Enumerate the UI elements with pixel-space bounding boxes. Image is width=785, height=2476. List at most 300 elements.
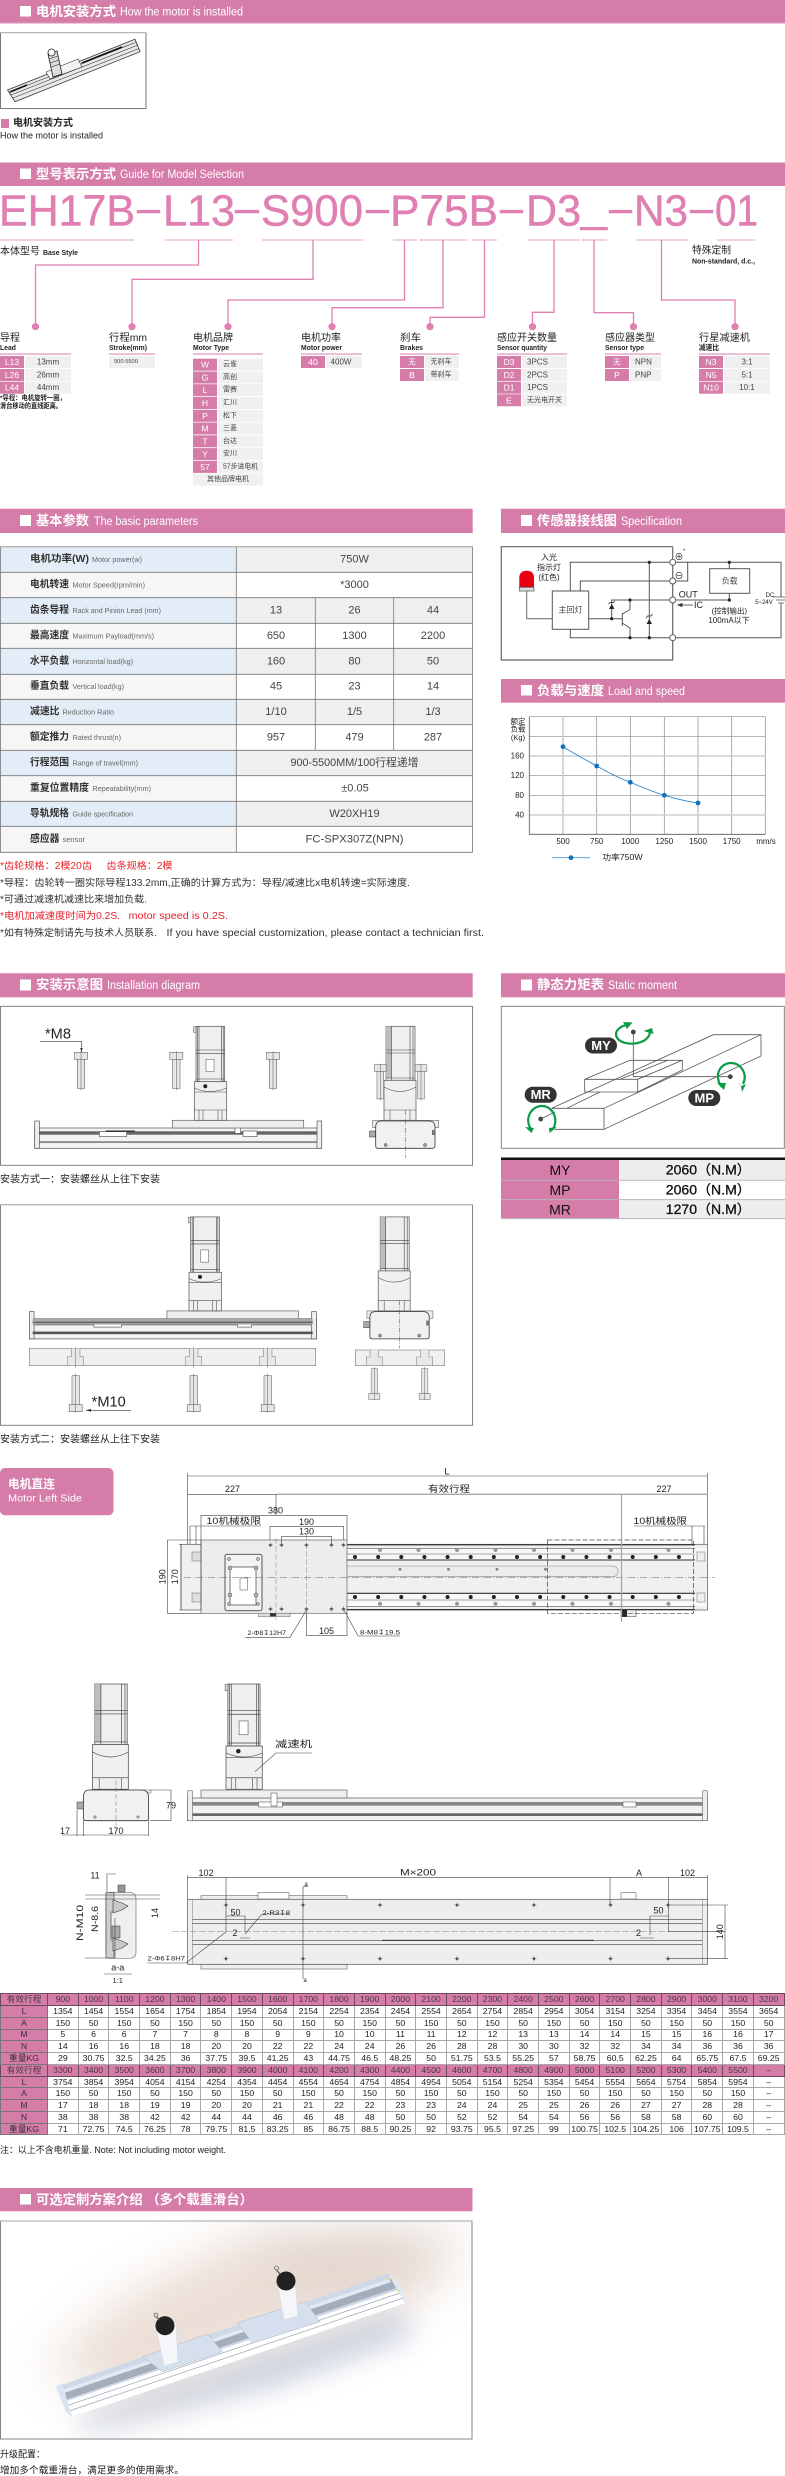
table: stroke dimensions and weight: 5754 (667, 2077, 686, 2087)
table: stroke dimensions and weight: 19 (150, 2100, 160, 2110)
selector: sensor quantity (497, 331, 567, 406)
table: stroke dimensions and weight: 21 (273, 2100, 282, 2110)
table: stroke dimensions and weight: 1500 (237, 1994, 257, 2004)
selector: lead: 26mm (37, 370, 59, 380)
selector: planetary reducer: 3:1 (741, 358, 753, 366)
icon: MR rotation arrow (525, 1106, 557, 1133)
table: stroke dimensions and weight: 3000 (698, 1994, 717, 2004)
table: stroke dimensions and weight: 4954 (421, 2077, 441, 2087)
table: basic parameters: 26 (348, 604, 361, 616)
table: stroke dimensions and weight: 28 (702, 2100, 712, 2110)
drawing: bottom view with dimensions: 102 (680, 1868, 695, 1878)
notes: parameter footnotes (0, 859, 484, 939)
table: stroke dimensions and weight: 150 (301, 2088, 316, 2098)
table: static moment (501, 1158, 785, 1219)
label: MR: MR (531, 1087, 551, 1102)
caption: installation method one: 安装方式一：安装螺丝从上往下安装 (0, 1172, 160, 1186)
table: stroke dimensions and weight: 6 (91, 2029, 96, 2039)
table: stroke dimensions and weight: 24 (365, 2041, 375, 2051)
table: stroke dimensions and weight: 50 (89, 2088, 98, 2098)
table: stroke dimensions and weight: 4500 (421, 2065, 441, 2075)
table: stroke dimensions and weight: 5954 (728, 2077, 748, 2087)
table: stroke dimensions and weight: 29 (58, 2053, 68, 2063)
table: stroke dimensions and weight: 1654 (145, 2006, 165, 2016)
table: stroke dimensions and weight: 71 (58, 2124, 68, 2134)
table: stroke dimensions and weight: 36 (181, 2053, 190, 2063)
diagram: sensor wiring: DC (766, 593, 775, 599)
line chart: load vs speed: 500 (556, 837, 570, 846)
table: stroke dimensions and weight: 150 (56, 2088, 70, 2098)
table: stroke dimensions and weight: 19 (181, 2100, 190, 2110)
selector: planetary reducer: N5 (706, 370, 717, 380)
table: stroke dimensions and weight: 4300 (360, 2065, 379, 2075)
table: basic parameters: Motor Speed(rpm/min) (72, 582, 145, 590)
drawing: section a-a (75, 1870, 160, 1985)
drawing: bottom view with dimensions: A (636, 1868, 642, 1878)
table: stroke dimensions and weight: 13 (549, 2029, 559, 2039)
selector: sensor quantity: 感应开关数量 (497, 331, 557, 344)
table: basic parameters: 957 (267, 732, 285, 744)
table: stroke dimensions and weight: 3354 (667, 2006, 686, 2016)
table: stroke dimensions and weight: 53.5 (484, 2053, 501, 2063)
table: stroke dimensions and weight: 34 (641, 2041, 651, 2051)
table: stroke dimensions and weight (0, 1993, 785, 2135)
panel: multi-carriage render (0, 2220, 472, 2439)
table: stroke dimensions and weight: 85 (304, 2124, 313, 2134)
table: stroke dimensions and weight: 5854 (698, 2077, 717, 2087)
selector: motor type: Motor Type (193, 343, 229, 352)
table: stroke dimensions and weight: 30 (518, 2041, 528, 2051)
table: basic parameters: 1300 (342, 630, 367, 642)
selector: lead: 滑台移动的直线距离。 (0, 401, 62, 410)
table: stroke dimensions and weight: 14 (58, 2041, 68, 2051)
table: stroke dimensions and weight: 3554 (728, 2006, 748, 2016)
table: stroke dimensions and weight: – (766, 2077, 771, 2087)
table: stroke dimensions and weight: 43 (304, 2053, 313, 2063)
drawing: top view with dimensions: 190 (299, 1517, 314, 1527)
table: stroke dimensions and weight: 150 (547, 2088, 561, 2098)
drawing: side view (364, 1217, 433, 1348)
table: stroke dimensions and weight: 69.25 (758, 2053, 780, 2063)
table: basic parameters: 重复位置精度 (30, 781, 89, 794)
table: stroke dimensions and weight: 54 (549, 2112, 559, 2122)
selector: sensor quantity: 2PCS (527, 370, 548, 380)
table: stroke dimensions and weight: – (766, 2088, 771, 2098)
caption: how the motor is installed: 电机安装方式 (13, 116, 73, 129)
selector: sensor quantity: 1PCS (527, 383, 548, 392)
diagram: sensor wiring: ⊖ (674, 571, 684, 581)
table: basic parameters: 1/3 (425, 706, 441, 718)
label: MP: MP (695, 1090, 714, 1106)
bolts: M8 (40, 1026, 280, 1090)
table: basic parameters: 750W (340, 554, 369, 566)
line chart: load vs speed (510, 716, 776, 862)
table: basic parameters: 垂直负载 (30, 679, 69, 692)
selector: motor type (193, 331, 263, 486)
table: basic parameters: Vertical load(kg) (72, 684, 124, 691)
table: stroke dimensions and weight: 15 (672, 2029, 681, 2039)
table: stroke dimensions and weight: 4054 (145, 2077, 165, 2087)
table: stroke dimensions and weight: 58 (641, 2112, 651, 2122)
table: stroke dimensions and weight: 81.5 (238, 2124, 255, 2134)
table: stroke dimensions and weight: 5654 (636, 2077, 656, 2087)
table: stroke dimensions and weight: 17 (764, 2029, 773, 2039)
table: stroke dimensions and weight: 2254 (329, 2006, 349, 2016)
selector: brakes: B (409, 370, 415, 380)
selector: brakes: 刹车 (400, 331, 421, 344)
table: stroke dimensions and weight: 5454 (575, 2077, 594, 2087)
table: basic parameters: Guide specification (72, 811, 133, 818)
drawing: bottom view with dimensions: 2-R3↧8 (262, 1909, 290, 1917)
drawing: carriage plates (142, 2302, 320, 2372)
table: basic parameters: 行程范围 (30, 756, 69, 768)
table: stroke dimensions and weight: 16 (733, 2029, 743, 2039)
table: basic parameters: Range of travel(mm) (72, 760, 138, 768)
table: stroke dimensions and weight: 50 (764, 2018, 773, 2028)
table: stroke dimensions and weight: 44 (242, 2112, 252, 2122)
diagram: sensor wiring: (控制输出) (712, 606, 747, 616)
table: stroke dimensions and weight: 102.5 (604, 2124, 626, 2134)
table: stroke dimensions and weight: 5500 (728, 2065, 748, 2075)
notes: parameter footnotes: *齿轮规格：2模20齿 (0, 859, 92, 872)
selector: sensor type: NPN (635, 358, 652, 366)
table: stroke dimensions and weight: 52 (457, 2112, 467, 2122)
table: stroke dimensions and weight: 22 (365, 2100, 375, 2110)
table: stroke dimensions and weight: 23 (426, 2100, 436, 2110)
table: stroke dimensions and weight: 7 (183, 2029, 188, 2039)
table: stroke dimensions and weight: 3100 (728, 1994, 748, 2004)
drawing: section a-a: a-a (111, 1962, 124, 1972)
drawing: bottom view with dimensions: 50 (653, 1906, 664, 1916)
table: stroke dimensions and weight: 79.75 (205, 2124, 227, 2134)
heading: installation diagram: 安装示意图 (36, 976, 103, 992)
line chart: load vs speed: 120 (511, 771, 525, 780)
drawing: top view with dimensions: 227 (225, 1484, 240, 1494)
table: stroke dimensions and weight: 3300 (53, 2065, 72, 2075)
selector: motor type: L (203, 385, 208, 395)
model code: EH17B (0, 186, 135, 236)
diagram: sensor wiring: OUT (679, 589, 698, 599)
table: stroke dimensions and weight: 42 (150, 2112, 160, 2122)
table: stroke dimensions and weight: 17 (58, 2100, 68, 2110)
table: stroke dimensions and weight: 1400 (207, 1994, 226, 2004)
drawing: top view with dimensions: 227 (656, 1484, 672, 1494)
table: basic parameters: 900-5500MM/100行程递增 (290, 755, 418, 769)
table: stroke dimensions and weight: 28 (488, 2041, 497, 2051)
table: stroke dimensions and weight: 4900 (544, 2065, 564, 2075)
table: basic parameters: 287 (424, 732, 442, 744)
table: stroke dimensions and weight: 2700 (606, 1994, 625, 2004)
table: static moment: MR (549, 1202, 571, 1218)
selector: motor type: 雷赛 (223, 385, 237, 394)
table: stroke dimensions and weight: 67.5 (730, 2053, 746, 2063)
table: stroke dimensions and weight: – (766, 2124, 771, 2134)
table: stroke dimensions and weight: 72.75 (83, 2124, 104, 2134)
table: stroke dimensions and weight: 2354 (360, 2006, 379, 2016)
table: stroke dimensions and weight: 99 (549, 2124, 559, 2134)
table: stroke dimensions and weight: 104.25 (633, 2124, 659, 2134)
selector: stroke: 行程mm (109, 331, 147, 344)
table: stroke dimensions and weight: 9 (306, 2029, 311, 2039)
table: stroke dimensions and weight: 60 (733, 2112, 743, 2122)
drawing: motor end view: 17 (60, 1826, 70, 1836)
table: stroke dimensions and weight: 23 (396, 2100, 405, 2110)
selector: brakes: 无 (408, 358, 416, 366)
line chart: load vs speed: mm/s (756, 837, 776, 846)
table: stroke dimensions and weight: 1900 (360, 1994, 379, 2004)
table: stroke dimensions and weight: 65.75 (696, 2053, 718, 2063)
bolts: M8: *M8 (45, 1026, 71, 1042)
drawing: motor side view with reducer label: 减速机 (275, 1738, 313, 1750)
table: stroke dimensions and weight: 18 (89, 2100, 98, 2110)
label: non-standard: 特殊定制 (692, 244, 731, 256)
selector: planetary reducer: 行星减速机 (699, 331, 750, 344)
table: stroke dimensions and weight: 56 (580, 2112, 589, 2122)
selector: motor type: 三菱 (223, 423, 237, 432)
table: stroke dimensions and weight: 22 (304, 2041, 313, 2051)
table: stroke dimensions and weight: 4254 (207, 2077, 226, 2087)
drawing: top view with dimensions: 10机械极限 (206, 1515, 261, 1526)
table: stroke dimensions and weight: A (21, 2088, 27, 2098)
selector: stroke (109, 331, 155, 368)
table: stroke dimensions and weight: 4200 (329, 2065, 349, 2075)
table: stroke dimensions and weight: 4800 (513, 2065, 533, 2075)
table: stroke dimensions and weight: 60.5 (607, 2053, 624, 2063)
selector: lead (0, 332, 71, 410)
table: stroke dimensions and weight: 10 (334, 2029, 344, 2039)
table: stroke dimensions and weight: 27 (641, 2100, 651, 2110)
notes: parameter footnotes: *导程：齿轮转一圈实际导程133.2mm,正确的计算方式为：导程/减速比x电机转速=实际速度. (0, 876, 410, 889)
table: stroke dimensions and weight: 41.25 (267, 2053, 289, 2063)
table: stroke dimensions and weight: 12 (488, 2029, 497, 2039)
diagram: sensor wiring: 5~24V (755, 600, 773, 606)
table: basic parameters: Horizontal load(kg) (72, 659, 133, 666)
table: stroke dimensions and weight: 3154 (606, 2006, 625, 2016)
label: non-standard: Non-standard, d.c., (692, 256, 755, 266)
bolts: M10: *M10 (92, 1394, 126, 1410)
table: stroke dimensions and weight: 51.75 (451, 2053, 473, 2063)
table: stroke dimensions and weight: 4454 (268, 2077, 287, 2087)
heading: sensor specification (501, 509, 785, 533)
line chart: load vs speed: 40 (515, 810, 525, 820)
heading: basic parameters (0, 509, 473, 533)
table: basic parameters: 最高速度 (30, 628, 69, 642)
table: stroke dimensions and weight: 1454 (84, 2006, 103, 2016)
selector: motor type: 安川 (223, 449, 237, 458)
table: stroke dimensions and weight: 109.5 (727, 2124, 749, 2134)
selector: sensor type: 无 (613, 358, 621, 366)
notes: parameter footnotes: *如有特殊定制请先与技术人员联系. (0, 926, 157, 939)
heading: installation diagram: Installation diagram (107, 980, 200, 992)
table: stroke dimensions and weight: 3454 (698, 2006, 717, 2016)
table: stroke dimensions and weight: 16 (89, 2041, 98, 2051)
table: stroke dimensions and weight: 重量KG (9, 2124, 39, 2134)
heading: basic parameters: The basic parameters (94, 516, 198, 528)
table: stroke dimensions and weight: 1354 (53, 2006, 72, 2016)
selector: brakes: 无刹车 (430, 356, 452, 366)
table: stroke dimensions and weight: 24 (488, 2100, 497, 2110)
table: stroke dimensions and weight: 3500 (115, 2065, 134, 2075)
table: basic parameters: 2200 (421, 630, 445, 642)
caption: how the motor is installed: How the motor is installed (0, 130, 103, 140)
table: basic parameters: 导轨规格 (30, 806, 69, 819)
selector: lead: 44mm (37, 383, 59, 392)
table: stroke dimensions and weight: 42 (181, 2112, 190, 2122)
label: MY: MY (591, 1038, 611, 1053)
drawing: rail (56, 2268, 405, 2417)
table: stroke dimensions and weight: 20 (211, 2100, 221, 2110)
selector: motor type: 台达 (223, 436, 237, 445)
table: stroke dimensions and weight: 4100 (299, 2065, 318, 2075)
drawing: top view with dimensions (158, 1466, 715, 1637)
model code: – (690, 184, 713, 232)
table: stroke dimensions and weight: 5 (60, 2029, 65, 2039)
model code: – (235, 184, 260, 232)
table: stroke dimensions and weight: 150 (485, 2018, 500, 2028)
diagram: sensor wiring: 100mA以下 (708, 616, 750, 625)
table: stroke dimensions and weight: 50 (334, 2018, 344, 2028)
table: stroke dimensions and weight: 3700 (176, 2065, 195, 2075)
diagram: sensor wiring: (红色) (538, 572, 560, 582)
label: MY (585, 1038, 617, 1054)
table: stroke dimensions and weight: 26 (580, 2100, 589, 2110)
drawing: bottom view with dimensions: 102 (198, 1868, 214, 1878)
notes: parameter footnotes: If you have special customization, please contact a technician first. (166, 928, 484, 939)
table: basic parameters: *3000 (340, 579, 369, 591)
table: stroke dimensions and weight: 50 (273, 2018, 282, 2028)
table: stroke dimensions and weight: 4700 (483, 2065, 502, 2075)
selector: motor type: T (202, 436, 208, 446)
table: stroke dimensions and weight: 55.25 (512, 2053, 534, 2063)
table: basic parameters: 45 (270, 681, 282, 693)
drawing: top view with dimensions: 10机械极限 (634, 1515, 687, 1526)
table: stroke dimensions and weight: 20 (211, 2041, 221, 2051)
diagram: sensor wiring: * (683, 549, 686, 555)
table: stroke dimensions and weight: 58 (672, 2112, 681, 2122)
notes: parameter footnotes: 齿条规格：2模 (106, 859, 173, 872)
table: stroke dimensions and weight: 20 (242, 2041, 252, 2051)
table: stroke dimensions and weight: 1854 (207, 2006, 226, 2016)
table: stroke dimensions and weight: 150 (362, 2088, 377, 2098)
table: stroke dimensions and weight: 3054 (575, 2006, 594, 2016)
table: basic parameters: 160 (267, 655, 285, 667)
drawing: section a-a: N-M10 (75, 1905, 85, 1941)
table: basic parameters: 50 (427, 655, 439, 667)
table: stroke dimensions and weight: 50 (211, 2088, 221, 2098)
selector: brakes: Brakes (400, 343, 423, 352)
table: basic parameters: 电机功率(W) (30, 552, 89, 565)
table: basic parameters: 44 (427, 604, 439, 616)
drawing: motors (154, 2266, 298, 2366)
table: stroke dimensions and weight: 9 (275, 2029, 280, 2039)
table: stroke dimensions and weight: 5154 (483, 2077, 502, 2087)
table: stroke dimensions and weight: 24 (334, 2041, 344, 2051)
model code: D3 (526, 186, 581, 236)
caption: upgrade configuration (0, 2448, 184, 2476)
drawing: section a-a: 1:1 (112, 1976, 123, 1985)
table: stroke dimensions and weight: 7 (152, 2029, 157, 2039)
table: static moment: 2060（N.M） (666, 1182, 751, 1198)
table: stroke dimensions and weight: 37.75 (205, 2053, 227, 2063)
table: stroke dimensions and weight: 5300 (667, 2065, 686, 2075)
table: stroke dimensions and weight: 150 (669, 2018, 684, 2028)
table: static moment: MY (550, 1162, 571, 1178)
table: stroke dimensions and weight: 50 (89, 2018, 98, 2028)
table: stroke dimensions and weight: 38 (58, 2112, 68, 2122)
table: basic parameters: FC-SPX307Z(NPN) (306, 833, 404, 845)
table: stroke dimensions and weight: 1000 (84, 1994, 103, 2004)
table: stroke dimensions and weight: 34.25 (144, 2053, 166, 2063)
table: stroke dimensions and weight: 32 (610, 2041, 620, 2051)
table: stroke dimensions and weight: 25 (518, 2100, 528, 2110)
table: stroke dimensions and weight: 14 (580, 2029, 589, 2039)
table: stroke dimensions and weight: 3254 (636, 2006, 656, 2016)
table: stroke dimensions and weight: 150 (731, 2088, 745, 2098)
label: base style (0, 244, 78, 258)
selector: lead: Lead (0, 343, 16, 352)
model code: – (609, 184, 632, 232)
selector: lead: L26 (5, 370, 19, 380)
tag: motor left side: Motor Left Side (8, 1494, 82, 1504)
table: stroke dimensions and weight: 92 (426, 2124, 436, 2134)
table: stroke dimensions and weight: 36 (702, 2041, 712, 2051)
drawing: front view (35, 1026, 322, 1148)
table: stroke dimensions and weight: N (21, 2112, 27, 2122)
table: stroke dimensions and weight: – (766, 2100, 771, 2110)
table: basic parameters: 80 (348, 655, 361, 667)
table: basic parameters: 23 (348, 681, 361, 693)
selector: motor power: 400W (331, 358, 352, 366)
table: basic parameters: W20XH19 (329, 808, 380, 820)
table: stroke dimensions and weight: 150 (240, 2018, 254, 2028)
table: stroke dimensions and weight: 16 (702, 2029, 712, 2039)
table: stroke dimensions and weight: 4854 (391, 2077, 410, 2087)
caption: installation method two: 安装方式二：安装螺丝从上往下安装 (0, 1432, 160, 1446)
table: stroke dimensions and weight: 150 (669, 2088, 684, 2098)
table: stroke dimensions and weight: 28 (733, 2100, 743, 2110)
table: stroke dimensions and weight: 86.75 (328, 2124, 350, 2134)
icon: MP rotation arrow (717, 1063, 746, 1092)
drawing: motor side view with reducer label (188, 1684, 708, 1821)
table: stroke dimensions and weight: 12 (457, 2029, 467, 2039)
heading: static moment (501, 973, 785, 997)
table: stroke dimensions and weight: 60 (702, 2112, 712, 2122)
table: stroke dimensions and weight: 44 (211, 2112, 221, 2122)
table: stroke dimensions and weight: 39.5 (238, 2053, 255, 2063)
heading: how the motor is installed (0, 0, 785, 24)
table: stroke dimensions and weight: – (766, 2112, 771, 2122)
selector: sensor quantity: D2 (504, 370, 515, 380)
table: stroke dimensions and weight: 50 (580, 2018, 589, 2028)
selector: sensor quantity: 3PCS (527, 358, 548, 366)
selector: sensor quantity: D1 (504, 383, 515, 393)
table: stroke dimensions and weight: 32.5 (116, 2053, 133, 2063)
table: stroke dimensions and weight: 93.75 (451, 2124, 473, 2134)
table: basic parameters: Rack and Pinion Lead (mm) (72, 608, 161, 615)
table: stroke dimensions and weight: 36 (764, 2041, 773, 2051)
table: stroke dimensions and weight: 1554 (115, 2006, 134, 2016)
table: stroke dimensions and weight: 50 (702, 2088, 712, 2098)
table: basic parameters: Rated thrust(n) (72, 735, 121, 742)
table: stroke dimensions and weight: 25 (549, 2100, 559, 2110)
table: stroke dimensions and weight: 5100 (606, 2065, 625, 2075)
table: stroke dimensions and weight: N (21, 2041, 27, 2051)
table: stroke dimensions and weight: 3954 (115, 2077, 134, 2087)
line chart: load vs speed: 1000 (621, 837, 640, 846)
diagram: sensor wiring: 负载 (722, 576, 738, 586)
table: stroke dimensions and weight: 10 (365, 2029, 375, 2039)
table: stroke dimensions and weight: 150 (608, 2088, 622, 2098)
